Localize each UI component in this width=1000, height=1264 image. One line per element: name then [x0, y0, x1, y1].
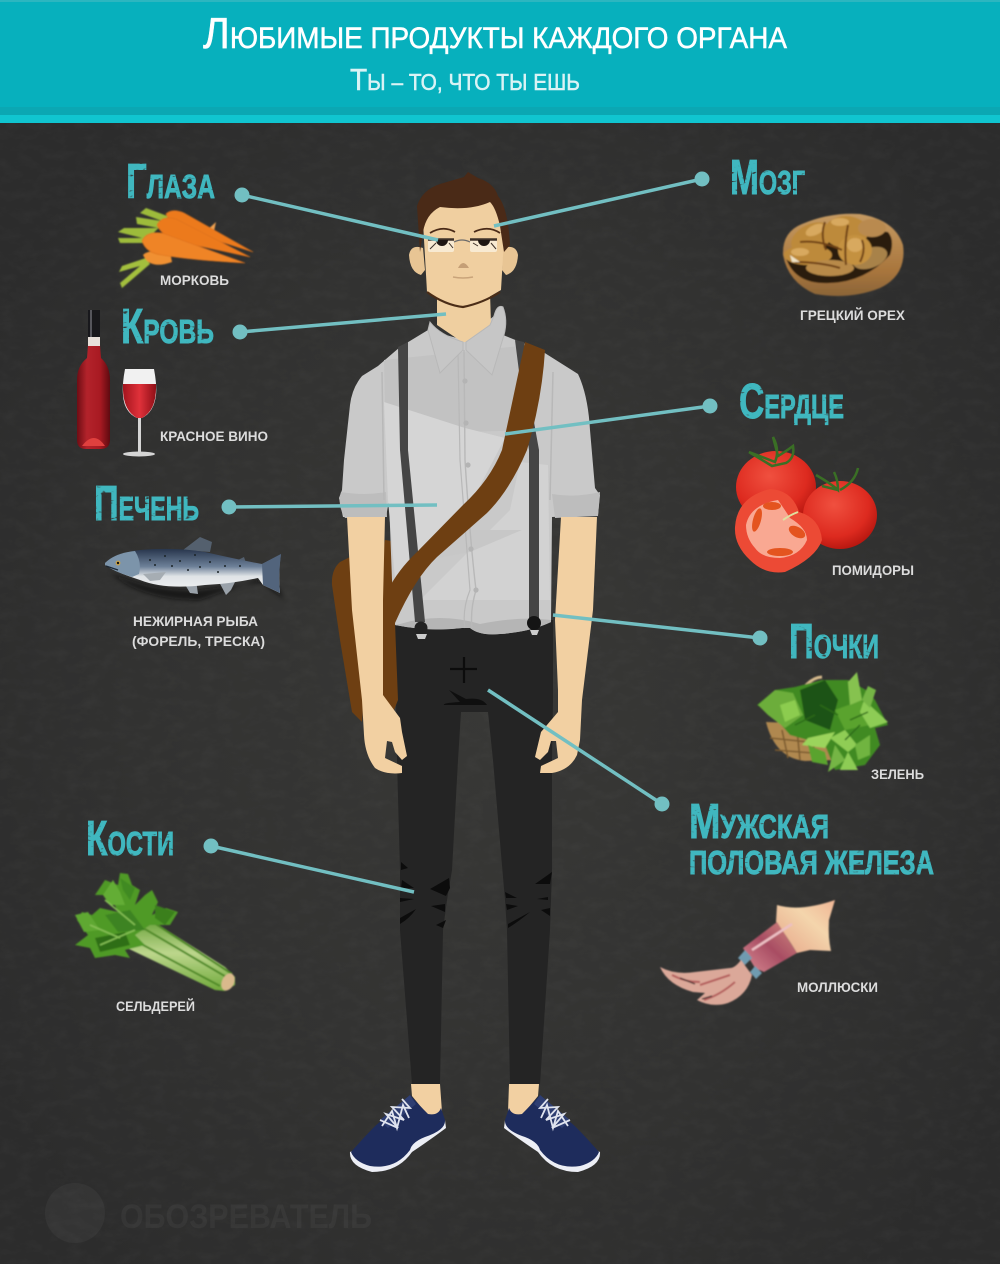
hair: [417, 172, 510, 252]
food: squid: [660, 900, 835, 1005]
face: [423, 200, 504, 307]
label: tomatoes: ПОМИДОРЫ: [832, 562, 914, 578]
connector: blood: [232, 314, 446, 340]
cut tomato: [735, 489, 822, 572]
head: [409, 172, 518, 307]
food: fish: [105, 537, 285, 600]
header band: [0, 0, 1000, 123]
connector: eyes: [234, 188, 438, 240]
heading: bones: КОСТИ: [86, 812, 174, 866]
food: carrots: [118, 208, 253, 288]
heading: blood: КРОВЬ: [121, 300, 214, 354]
shirt: [339, 306, 600, 634]
bag strap: [383, 342, 545, 710]
eyebrows: [430, 229, 500, 233]
shirt shading: [340, 345, 600, 634]
heading: male gland second line: ПОЛОВАЯ ЖЕЛЕЗА: [689, 844, 934, 881]
watermark: ОБОЗРЕВАТЕЛЬ: [120, 1198, 372, 1236]
suspenders: [398, 340, 541, 639]
watermark: [45, 1183, 372, 1243]
label: celery: СЕЛЬДЕРЕЙ: [116, 997, 195, 1014]
heading: eyes: ГЛАЗА: [126, 155, 215, 209]
connector: kidneys: [553, 615, 768, 646]
collar: [428, 306, 506, 375]
connector: heart: [505, 398, 718, 434]
heading: liver: ПЕЧЕНЬ: [94, 477, 199, 531]
connector: brain: [494, 172, 710, 226]
food: celery: [75, 873, 237, 993]
heading: male gland: МУЖСКАЯ: [689, 795, 829, 849]
label: walnut: ГРЕЦКИЙ ОРЕХ: [800, 306, 906, 323]
heading: kidneys: ПОЧКИ: [789, 615, 879, 669]
food: walnut: [783, 214, 904, 296]
label: molluscs: МОЛЛЮСКИ: [797, 979, 878, 995]
neck: [437, 292, 491, 342]
trouser details: [400, 657, 552, 928]
label: greens: ЗЕЛЕНЬ: [871, 766, 924, 782]
glasses: [428, 240, 497, 252]
left arm: [347, 517, 407, 773]
food: tomatoes: [735, 437, 877, 572]
person illustration: [332, 172, 600, 1172]
connector: bones: [204, 838, 414, 892]
heading: brain: МОЗГ: [730, 151, 805, 205]
food: wine glass: [123, 369, 156, 456]
right shoe: [504, 1095, 600, 1172]
heading: heart: СЕРДЦЕ: [739, 375, 844, 429]
label: lean fish line 2: (ФОРЕЛЬ, ТРЕСКА): [132, 633, 265, 649]
label: carrot: МОРКОВЬ: [160, 272, 229, 288]
right arm: [535, 517, 597, 773]
title: ЛЮБИМЫЕ ПРОДУКТЫ КАЖДОГО ОРГАНА: [203, 9, 787, 58]
ankles: [411, 1084, 539, 1118]
left shoe: [350, 1095, 446, 1172]
label: red wine: КРАСНОЕ ВИНО: [160, 428, 268, 444]
food: wine bottle: [77, 310, 110, 449]
mouth: [453, 277, 473, 278]
trousers: [395, 620, 553, 1084]
nose: [458, 263, 469, 268]
label: lean fish line 1: НЕЖИРНАЯ РЫБА: [133, 613, 258, 629]
subtitle: ТЫ – ТО, ЧТО ТЫ ЕШЬ: [350, 62, 580, 97]
ears: [409, 247, 518, 275]
connector: male gland: [488, 690, 670, 812]
food: basket of greens: [757, 672, 888, 772]
jaw line: [427, 292, 500, 307]
bag: [332, 540, 398, 722]
connector: liver: [222, 500, 437, 514]
